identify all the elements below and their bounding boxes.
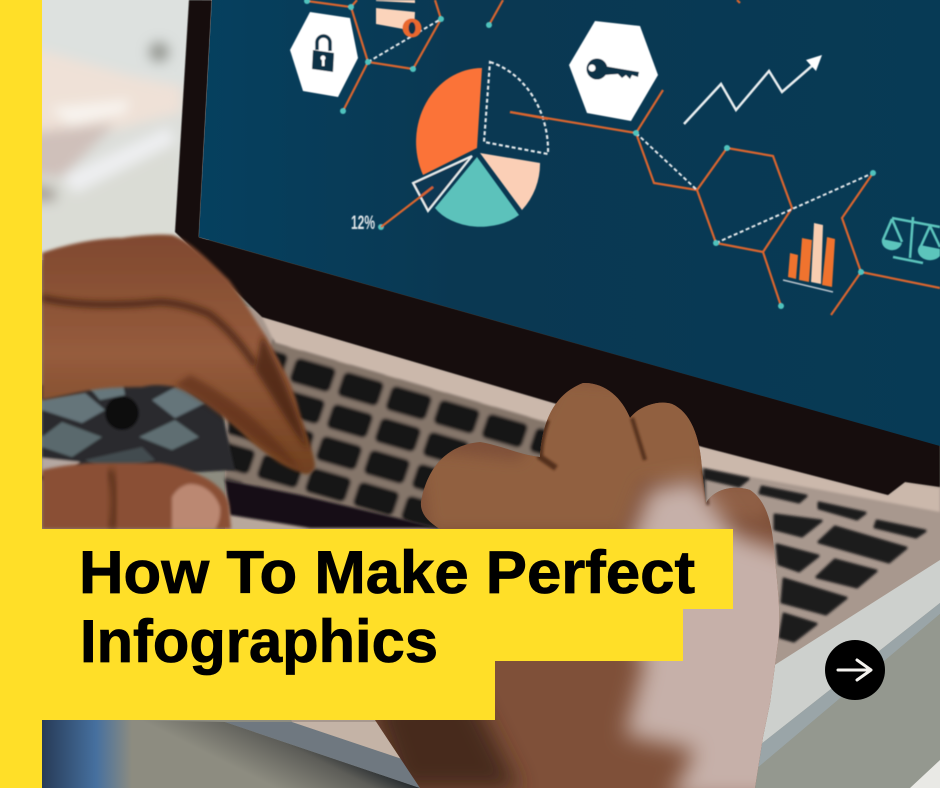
keyboard left keys bbox=[225, 338, 705, 610]
thumb bbox=[42, 463, 231, 529]
grey blurred keys on the left bbox=[42, 380, 235, 480]
right keyboard keys bbox=[705, 470, 925, 641]
icon: document with badge bbox=[376, 0, 422, 38]
deck strip above keys bbox=[262, 317, 940, 512]
title text bbox=[79, 539, 695, 675]
pie chart bbox=[351, 62, 548, 234]
pale sheen on back of hand bbox=[614, 468, 780, 788]
silver palm rest bbox=[760, 560, 940, 745]
icon: rising arrow line bbox=[684, 55, 822, 124]
icon: bar chart bbox=[783, 223, 835, 292]
laptop deck bbox=[225, 300, 940, 722]
screen graphics bbox=[290, 0, 940, 315]
finger creases bbox=[540, 418, 708, 505]
laptop lid bezel bbox=[175, 0, 940, 495]
table right bbox=[745, 614, 940, 788]
title banner bbox=[42, 529, 733, 720]
orange network lines bbox=[307, 0, 940, 315]
dark lower hand bbox=[375, 715, 524, 788]
laptop screen bbox=[199, 0, 940, 446]
finger shadow bbox=[255, 335, 308, 450]
pie label: 12% bbox=[351, 213, 375, 234]
table surface bbox=[120, 720, 420, 788]
small hinge detail bbox=[242, 293, 258, 310]
palm rest rim bbox=[755, 603, 940, 770]
title text: Infographics bbox=[80, 608, 438, 675]
white corner bbox=[910, 760, 940, 788]
right hand bbox=[370, 380, 810, 788]
knuckle skin tone bbox=[420, 380, 775, 530]
network nodes bbox=[304, 0, 876, 309]
arrow button bbox=[825, 640, 885, 700]
photo background bbox=[30, 0, 202, 260]
left hand bbox=[42, 235, 315, 529]
fingers bbox=[42, 235, 315, 474]
icon: balance scale bbox=[882, 217, 940, 263]
finger crease bbox=[42, 298, 255, 365]
pale deck under keyboard bbox=[225, 505, 445, 529]
blue clothing at lower left bbox=[42, 720, 132, 788]
dashed connector lines bbox=[368, 19, 873, 243]
title text: How To Make Perfect bbox=[79, 539, 695, 606]
yellow left stripe bbox=[0, 0, 42, 788]
icon: padlock hexagon bbox=[290, 12, 358, 97]
laptop front edge bbox=[225, 722, 432, 788]
icon: key hexagon bbox=[569, 21, 658, 121]
photo base bbox=[42, 240, 940, 788]
black lower keyboard edge bbox=[225, 480, 440, 528]
